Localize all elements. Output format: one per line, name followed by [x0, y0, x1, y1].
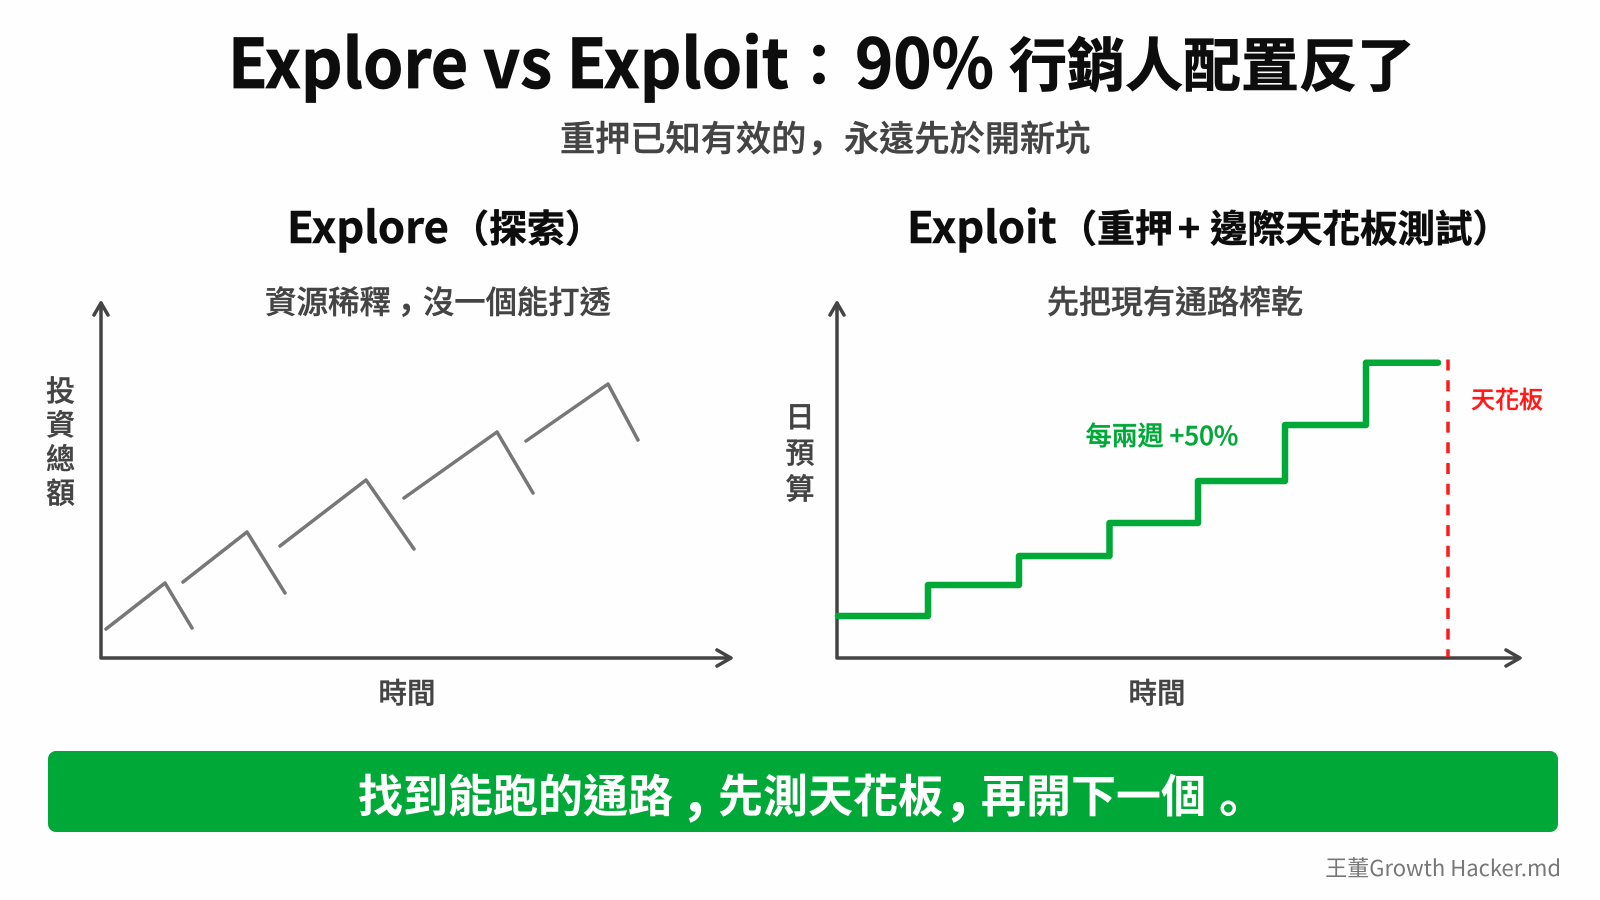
y axis label: total investment: 額: [46, 470, 75, 512]
heading: exploit: +: [1178, 198, 1200, 253]
footer credit: 王董Growth Hacker.md: [1325, 851, 1561, 883]
stepped budget line: [838, 363, 1438, 616]
heading: explore: [287, 193, 603, 256]
subtitle: 重押已知有效的: [560, 111, 806, 162]
ceiling dashed line: [1446, 360, 1450, 657]
label: ceiling: 天花板: [1471, 380, 1543, 415]
panel: explore: [46, 193, 731, 712]
caption: exploit: 先把現有通路榨乾: [1047, 277, 1303, 323]
subtitle: 永遠先於開新坑: [844, 111, 1090, 162]
banner text: 再開下一個: [981, 760, 1206, 825]
x axis label: time: 時間: [1128, 671, 1186, 712]
y axis label: total investment: 總: [46, 436, 75, 478]
title: Explore vs Exploit: [228, 9, 789, 108]
caption: explore: [265, 271, 611, 323]
x axis label: time: 時間: [378, 671, 436, 712]
y axis label: daily budget: 日: [785, 394, 815, 436]
chart axes: [830, 303, 1520, 666]
heading: exploit: [907, 193, 1510, 256]
heading: explore: （探索）: [451, 198, 603, 253]
y axis label: total investment: 資: [46, 402, 75, 444]
banner text: [358, 752, 1267, 831]
caption: explore: ，: [397, 271, 433, 323]
subtitle: ，: [807, 104, 847, 162]
subtitle: [560, 104, 1090, 162]
heading: explore: Explore: [287, 193, 449, 256]
banner text: ，: [943, 752, 997, 831]
y axis label: total investment: 投: [46, 368, 75, 410]
chart axes: [94, 303, 731, 666]
title: ：: [790, 19, 848, 103]
caption: explore: 沒一個能打透: [423, 278, 611, 323]
heading: exploit: Exploit: [907, 193, 1057, 256]
y axis label: daily budget: 算: [785, 466, 815, 508]
banner text: ，: [680, 752, 734, 831]
title: 行銷人配置反了: [1009, 19, 1415, 103]
sawtooth line chart: [106, 384, 638, 629]
banner: [48, 751, 1558, 832]
title: 90%: [855, 9, 994, 108]
banner text: 。: [1219, 756, 1267, 826]
heading: exploit: （重押: [1059, 198, 1173, 253]
caption: explore: 資源稀釋: [265, 277, 391, 323]
panel: exploit: [785, 193, 1543, 712]
banner text: 先測天花板: [718, 760, 943, 825]
label: +50% every two weeks: 每兩週 +50%: [1086, 416, 1238, 453]
title: [228, 9, 1415, 108]
heading: exploit: 邊際天花板測試）: [1210, 198, 1510, 253]
y axis label: daily budget: 預: [785, 430, 815, 472]
banner text: 找到能跑的通路: [358, 760, 673, 825]
